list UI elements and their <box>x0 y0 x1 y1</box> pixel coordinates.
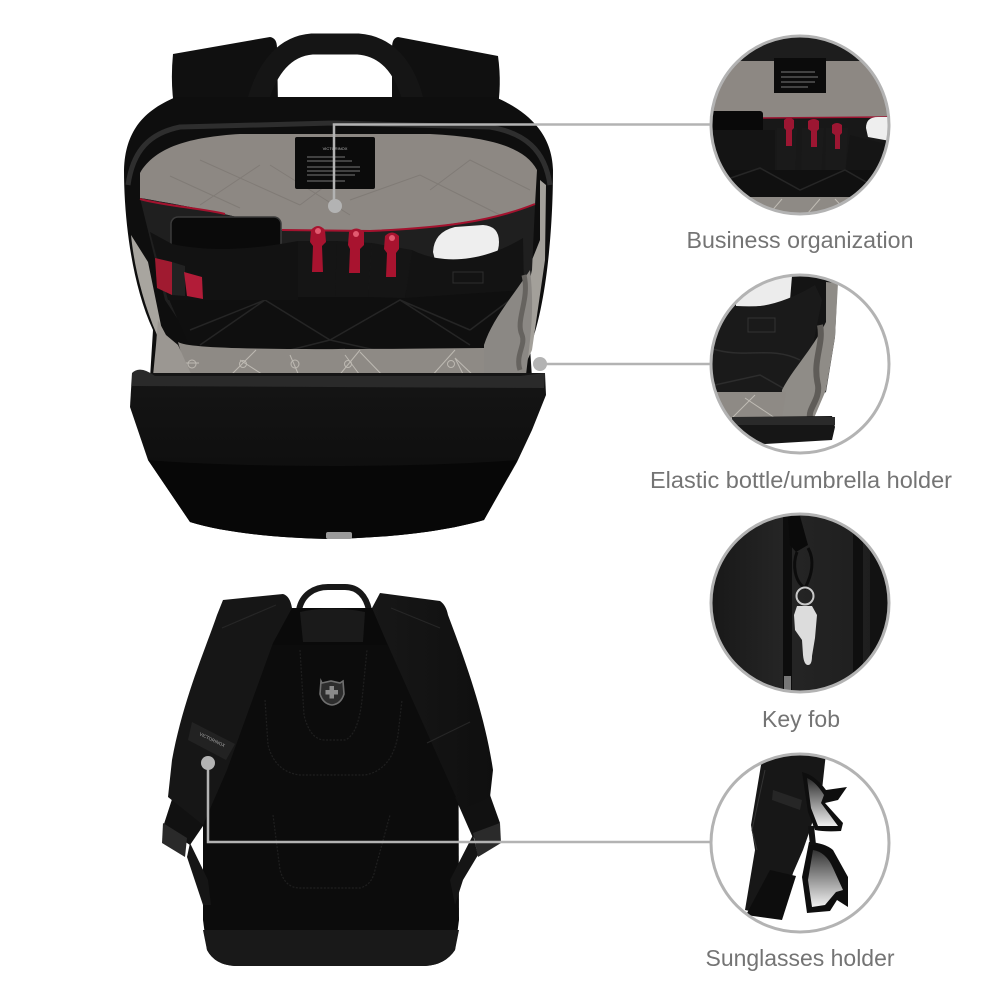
detail circle: elastic holder <box>710 274 890 454</box>
caption: business organization: Business organization <box>686 227 914 253</box>
body back panel <box>203 643 459 966</box>
elastic pouch <box>484 270 532 378</box>
detail circle: key fob <box>710 513 890 693</box>
label text lines <box>781 72 818 87</box>
left shoulder strap <box>168 594 292 825</box>
detail circle: business organization <box>710 35 890 217</box>
phone <box>171 217 281 253</box>
white earbud case <box>433 225 499 264</box>
strap seams <box>222 605 470 743</box>
side liner right <box>512 180 546 372</box>
Swiss shield logo <box>320 681 344 705</box>
pocket logo patch <box>453 272 483 283</box>
right shoulder strap <box>372 593 493 810</box>
pocket stitching <box>265 650 402 888</box>
right pocket <box>405 238 524 298</box>
quilted lower panel <box>165 290 525 350</box>
floor pattern <box>185 350 476 378</box>
label in circle <box>774 58 826 93</box>
strap brand tab: VICTORINOX <box>199 731 226 748</box>
key ring <box>796 588 814 604</box>
red tags <box>155 258 203 299</box>
ring <box>711 514 889 692</box>
liner diamond pattern <box>170 160 530 215</box>
flap zip band <box>132 370 545 388</box>
caption: sunglasses holder: Sunglasses holder <box>706 945 895 971</box>
floor liner <box>178 342 484 378</box>
bottom seam shade <box>148 460 517 539</box>
black document label: VICTORINOX <box>323 146 348 151</box>
base band <box>203 930 459 966</box>
zipper edge <box>128 123 550 185</box>
side liner left <box>131 235 175 378</box>
black document label <box>295 137 375 189</box>
right lower strap <box>450 835 478 905</box>
open backpack, front view <box>124 37 553 539</box>
caption: elastic holder: Elastic bottle/umbrella holder <box>650 467 952 493</box>
left webbing <box>163 790 205 845</box>
sunglasses <box>802 772 848 913</box>
detail circle: sunglasses holder <box>710 753 890 933</box>
right webbing <box>455 795 500 838</box>
wide left pocket <box>150 232 298 300</box>
lower front flap <box>130 373 546 539</box>
red pens in circle <box>784 118 842 149</box>
ring <box>711 754 889 932</box>
zip pull <box>326 532 352 539</box>
left lower strap <box>187 843 211 905</box>
upper grey liner <box>140 134 537 231</box>
callout 1 leader <box>328 124 711 213</box>
red piping <box>140 199 535 231</box>
ring <box>711 36 889 214</box>
shoulder straps behind body <box>172 37 500 112</box>
organizer back panel <box>140 198 535 345</box>
main body shell <box>124 97 553 378</box>
key <box>794 606 817 665</box>
left gusset <box>153 320 192 376</box>
red pens <box>310 226 399 277</box>
callout 4 leader <box>201 756 711 842</box>
pen loops <box>298 241 412 298</box>
callout 2 leader <box>533 357 711 371</box>
strap brand tab <box>188 722 235 760</box>
caption: key fob: Key fob <box>762 706 840 732</box>
top carry handle <box>258 44 413 100</box>
backpack, back view <box>162 587 501 966</box>
callout lines and dots <box>201 124 711 842</box>
head pad <box>272 608 392 645</box>
handle <box>299 587 369 610</box>
left buckle <box>162 823 187 857</box>
right buckle <box>473 823 501 857</box>
ring <box>711 275 889 453</box>
